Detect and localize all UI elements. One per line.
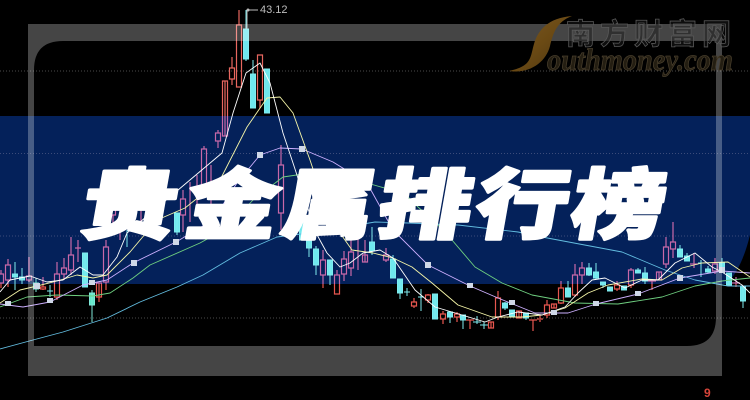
rising candles — [0, 10, 740, 331]
title: 榜 — [565, 164, 673, 249]
logo swoosh S — [509, 16, 572, 71]
logo chinese wordmark: 南方财富网 — [566, 18, 731, 51]
title: 行 — [469, 164, 577, 249]
peak price label 43.12 — [246, 4, 288, 29]
blue title band — [0, 116, 750, 284]
title — [75, 164, 673, 249]
line markers — [5, 146, 725, 315]
title: 属 — [276, 164, 382, 248]
falling candles — [12, 10, 746, 329]
peak price label 43.12: 43.12 — [260, 4, 288, 16]
MA5 line — [0, 63, 750, 322]
MA30 line — [0, 172, 750, 307]
moving average lines — [0, 63, 750, 349]
title: 贵 — [75, 164, 185, 249]
logo latin wordmark: outhmoney.com — [547, 42, 733, 77]
MA60 line — [0, 222, 750, 349]
title: 金 — [179, 164, 287, 249]
MA20 line — [0, 148, 750, 313]
MA10 line — [0, 97, 750, 317]
watermark logo: southmoney — [509, 16, 733, 77]
corner red digit: 9 — [704, 386, 711, 400]
title: 排 — [372, 164, 480, 249]
